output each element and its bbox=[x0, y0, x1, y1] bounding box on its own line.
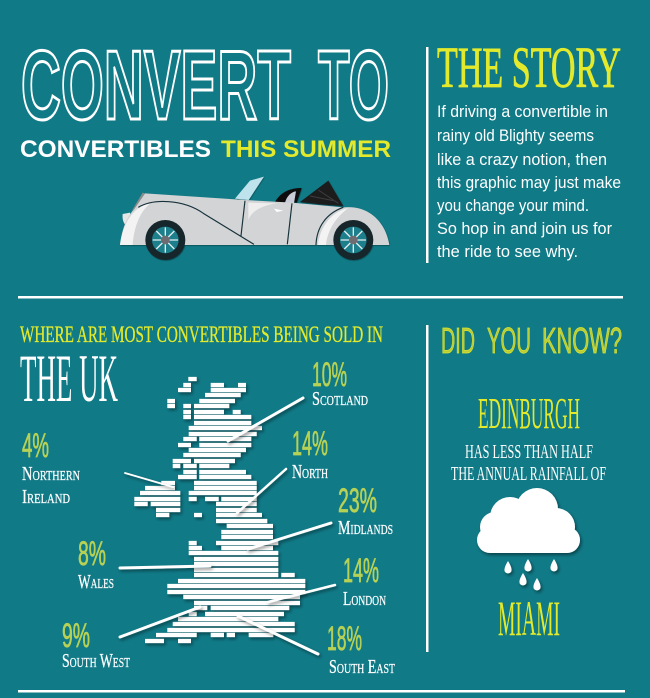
label: South East 18%: South East bbox=[329, 656, 395, 678]
label: Wales 8% bbox=[78, 535, 114, 593]
label: Wales 8%: 8% bbox=[78, 535, 106, 573]
icon: rain cloud bbox=[477, 488, 580, 590]
label: London 14%: 14% bbox=[343, 552, 379, 590]
story text: So hop in and join us for bbox=[437, 219, 612, 238]
label: South West 9% bbox=[62, 617, 130, 672]
rain drops bbox=[504, 559, 558, 590]
cloud bbox=[477, 488, 580, 553]
story text: this graphic may just make bbox=[437, 173, 621, 192]
label: North 14%: 14% bbox=[292, 425, 328, 463]
heading: did you know: DID bbox=[441, 320, 475, 361]
story text bbox=[437, 102, 621, 261]
story text: like a crazy notion, then bbox=[437, 150, 607, 169]
label: Northern Ireland 4%: Ireland bbox=[22, 486, 70, 508]
heading: where are most convertibles sold: WHERE ARE MOST CONVERTIBLES BEING SOLD IN bbox=[20, 322, 383, 347]
label: Scotland 10%: Scotland bbox=[312, 388, 368, 410]
story text: rainy old Blighty seems bbox=[437, 126, 594, 145]
text: rainfall comparison bbox=[451, 441, 606, 485]
label: Midlands 23%: Midlands bbox=[338, 517, 393, 539]
label: Midlands 23%: 23% bbox=[338, 482, 377, 520]
label: London 14% bbox=[343, 552, 386, 610]
label: North 14% bbox=[292, 425, 328, 483]
icon: front wheel bbox=[145, 220, 185, 260]
label: Northern Ireland 4% bbox=[22, 427, 80, 508]
icon: rear wheel bbox=[333, 220, 373, 260]
map: Great Britain bbox=[145, 379, 305, 641]
leader lines bbox=[120, 398, 335, 654]
label: South East 18%: 18% bbox=[327, 620, 362, 658]
story text: If driving a convertible in bbox=[437, 102, 608, 121]
story text: you change your mind. bbox=[437, 196, 589, 215]
label: Northern Ireland 4%: Northern bbox=[22, 463, 80, 485]
story text: the ride to see why. bbox=[437, 242, 578, 261]
icon: convertible car bbox=[120, 177, 389, 260]
label: Northern Ireland 4%: 4% bbox=[22, 427, 49, 465]
subtitle: CONVERTIBLES bbox=[20, 136, 211, 163]
title: TO bbox=[318, 30, 389, 140]
heading: did you know: YOU bbox=[487, 320, 531, 361]
title: CONVERT bbox=[21, 30, 291, 140]
map: Northern Ireland bbox=[134, 483, 180, 515]
label: Scotland 10% bbox=[312, 356, 368, 410]
text: THE UK bbox=[20, 340, 118, 416]
label: South West 9%: 9% bbox=[62, 617, 90, 655]
subtitle bbox=[20, 136, 391, 163]
label: Scotland 10%: 10% bbox=[312, 356, 347, 394]
label: Wales 8%: Wales bbox=[78, 571, 114, 593]
label: South East 18% bbox=[327, 620, 395, 678]
heading: did you know bbox=[441, 320, 622, 361]
subtitle: THIS SUMMER bbox=[221, 136, 391, 163]
label: London 14%: London bbox=[343, 588, 386, 610]
label: Midlands 23% bbox=[338, 482, 393, 539]
map: UK striped bbox=[134, 379, 305, 641]
label: North 14%: North bbox=[292, 461, 328, 483]
label: South West 9%: South West bbox=[62, 650, 130, 672]
